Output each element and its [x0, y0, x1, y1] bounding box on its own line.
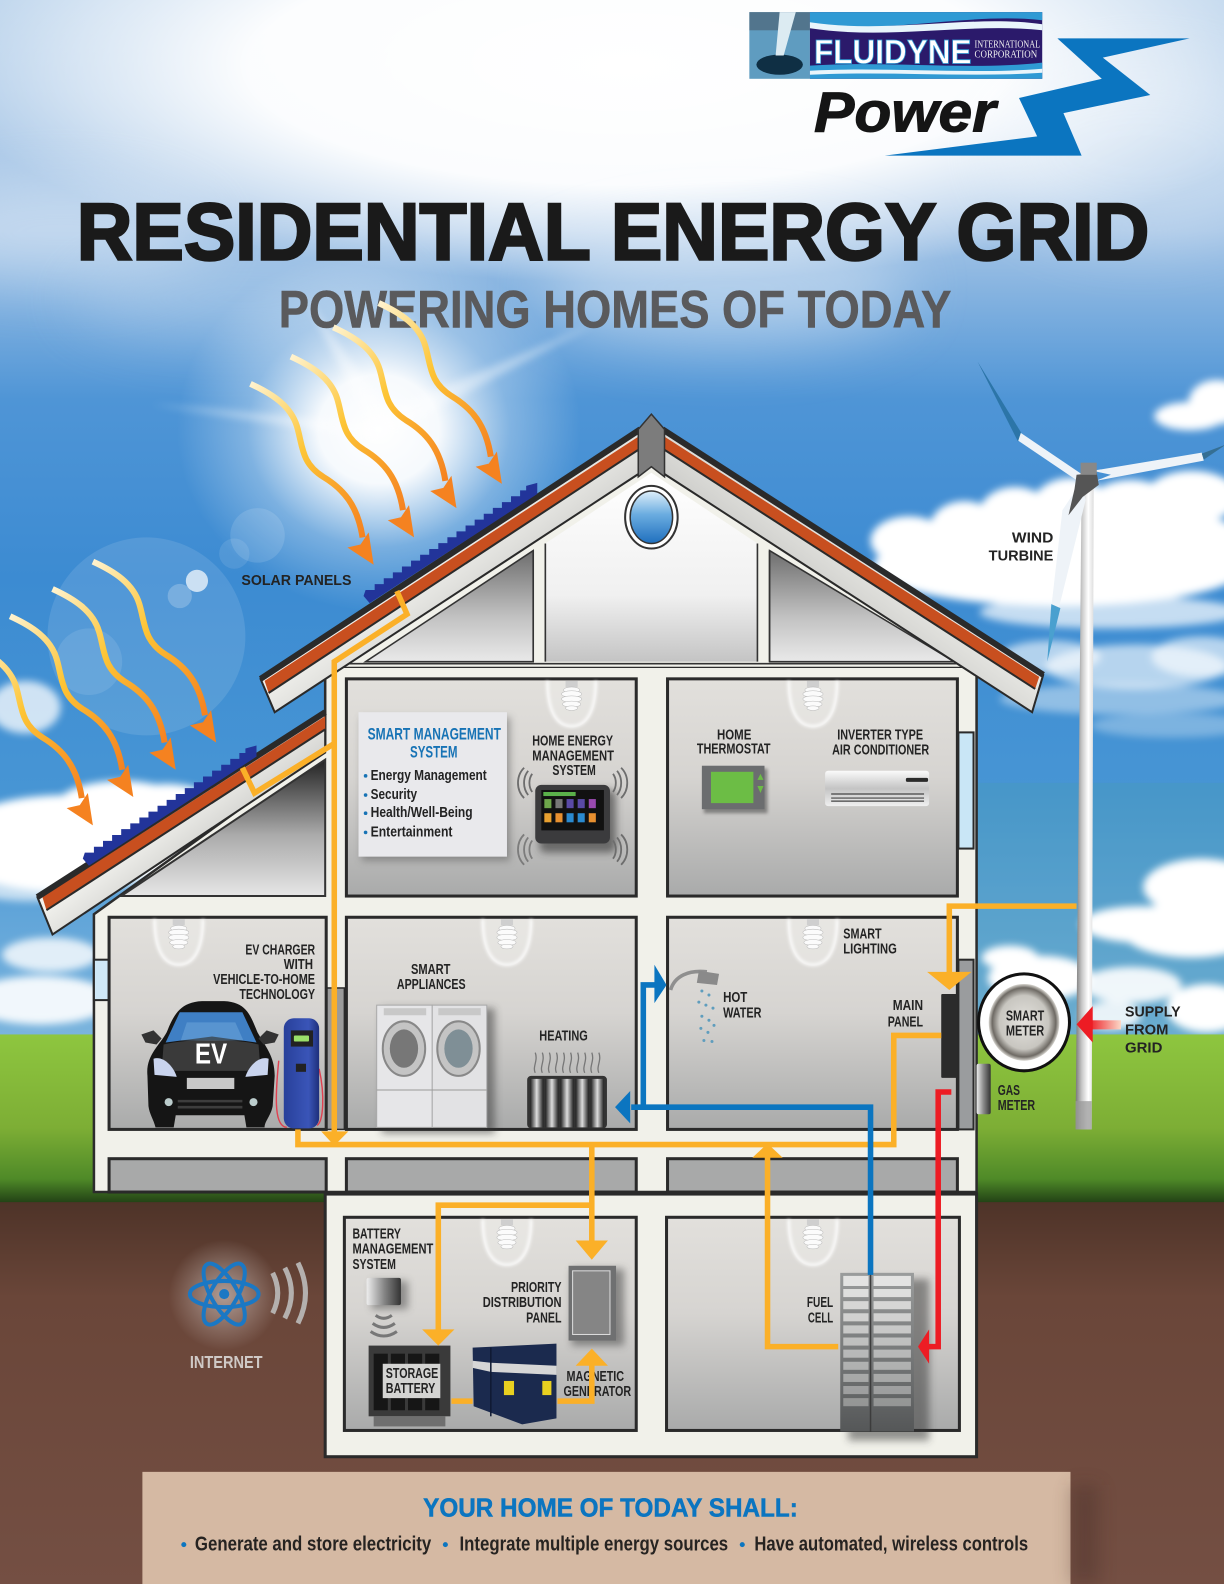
red heat line — [918, 1092, 951, 1364]
wind turbine label: WIND — [1012, 529, 1053, 546]
main roof right — [662, 429, 1043, 712]
turbine blades — [978, 362, 1224, 662]
icon: panel box — [569, 1266, 624, 1346]
storage battery — [369, 1346, 450, 1426]
orange power lines — [242, 591, 1077, 1401]
electric car — [141, 1001, 279, 1127]
ground: soil — [0, 1202, 1224, 1584]
gas meter — [977, 1064, 1035, 1114]
battery management system — [352, 1226, 434, 1336]
main panel: PANEL — [888, 1013, 923, 1030]
supply from grid label: SUPPLY — [1125, 1003, 1181, 1020]
smart meter — [979, 974, 1069, 1071]
home energy management system — [518, 733, 627, 865]
home thermostat: THERMOSTAT — [697, 741, 771, 758]
arrow: grid supply — [1077, 1006, 1121, 1043]
magnetic generator — [473, 1344, 631, 1424]
gas meter: GAS — [998, 1082, 1020, 1099]
ev charger station — [276, 1018, 323, 1128]
smart lighting label: LIGHTING — [843, 941, 897, 958]
solar panels upper — [364, 483, 537, 603]
basement room left — [344, 1217, 636, 1430]
magnetic generator: MAGNETIC — [567, 1368, 624, 1385]
storage battery: BATTERY — [386, 1380, 435, 1397]
gable wall — [338, 467, 964, 667]
logo: banner: CORPORATION — [975, 50, 1038, 61]
wind turbine label: TURBINE — [989, 548, 1053, 565]
bottom bullets: Integrate multiple energy sources — [460, 1534, 728, 1556]
lean-to attic — [121, 760, 325, 896]
bottom bullets: Generate and store electricity — [195, 1534, 432, 1556]
solar panels lower — [83, 746, 257, 866]
solar rays lower — [0, 562, 216, 825]
magnetic generator: GENERATOR — [564, 1383, 631, 1400]
internet label: INTERNET — [190, 1352, 263, 1372]
bottom bullets — [181, 1534, 1028, 1556]
logo: banner: FLUIDYNE — [814, 34, 972, 72]
logo: banner — [810, 12, 1042, 79]
smart appliances — [377, 961, 495, 1133]
attic middle — [545, 473, 757, 662]
storage battery: STORAGE — [386, 1365, 438, 1382]
wind turbine — [978, 362, 1224, 1129]
priority distribution panel: PRIORITY — [511, 1279, 562, 1296]
bottom panel — [142, 1472, 1099, 1584]
smart appliances: SMART — [411, 961, 451, 978]
room: hot water and main panel — [668, 917, 957, 1129]
smart management system card: Health/Well-Being — [371, 804, 473, 821]
inverter air conditioner — [825, 726, 929, 806]
ground: grass — [0, 1034, 1224, 1204]
smart meter: METER — [1006, 1022, 1044, 1039]
garage wall — [94, 667, 977, 1192]
home energy management system: MANAGEMENT — [532, 748, 615, 765]
bottom bullets: Have automated, wireless controls — [754, 1534, 1028, 1556]
title: RESIDENTIAL ENERGY GRID — [77, 188, 1149, 278]
inverter air conditioner: INVERTER TYPE — [837, 726, 923, 743]
hot water: WATER — [723, 1004, 762, 1021]
gas meter: METER — [998, 1097, 1035, 1114]
supply from grid label: GRID — [1125, 1040, 1162, 1057]
house — [37, 414, 1043, 1457]
icon: shower head — [671, 971, 719, 1043]
ceiling bulbs — [154, 681, 838, 1266]
priority distribution panel: DISTRIBUTION — [483, 1294, 562, 1311]
fuel cell: FUEL — [807, 1294, 833, 1311]
left wall window — [94, 960, 109, 1000]
solar rays upper — [250, 303, 502, 565]
battery management system: BATTERY — [352, 1226, 401, 1243]
inverter air conditioner: AIR CONDITIONER — [832, 742, 929, 759]
oval window — [625, 486, 678, 549]
logo: water photo — [749, 12, 810, 79]
lean-to roof — [37, 712, 325, 934]
smart lighting label: SMART — [843, 925, 882, 942]
smart appliances: APPLIANCES — [397, 976, 466, 993]
bottom heading: YOUR HOME OF TODAY SHALL: — [423, 1492, 798, 1522]
clouds — [0, 380, 1224, 1032]
heating radiator: HEATING — [539, 1028, 588, 1045]
smart management system card: SMART MANAGEMENT — [368, 725, 501, 743]
battery management system: MANAGEMENT — [352, 1241, 434, 1258]
home thermostat — [697, 726, 771, 813]
ev charger label: EV CHARGER — [245, 942, 315, 959]
basement shell — [325, 1194, 977, 1457]
right wall service chase — [958, 960, 974, 1129]
home energy management system: SYSTEM — [552, 762, 596, 779]
ev charger label: VEHICLE-TO-HOME — [213, 971, 315, 988]
smart management system card: Security — [371, 786, 418, 803]
basement room right — [667, 1217, 959, 1430]
sun glow — [47, 248, 596, 735]
heating radiator — [527, 1028, 607, 1128]
smart lighting label — [843, 925, 897, 958]
attic left — [366, 551, 533, 662]
hot water — [671, 971, 762, 1043]
sky background — [0, 0, 1224, 1051]
wind turbine label — [989, 529, 1053, 565]
smart management system card: Entertainment — [371, 823, 452, 840]
internet icon — [169, 1240, 305, 1372]
room: thermostat and air conditioner — [668, 679, 957, 896]
icon: hub tablet — [535, 785, 616, 853]
supply from grid label — [1125, 1003, 1181, 1057]
smart meter: SMART — [1006, 1007, 1045, 1024]
smart management system card: Energy Management — [371, 767, 487, 784]
subtitle: POWERING HOMES OF TODAY — [279, 280, 951, 339]
room: appliances — [346, 917, 636, 1129]
icon: radiator — [527, 1053, 607, 1128]
battery management system: SYSTEM — [352, 1256, 396, 1273]
icon: air conditioner — [825, 771, 929, 806]
ev charger label: WITH — [284, 956, 313, 973]
fuel cell — [807, 1273, 929, 1441]
garage chase — [326, 988, 344, 1129]
supply from grid label: FROM — [1125, 1021, 1168, 1038]
main roof left — [261, 429, 640, 712]
turbine tower — [1076, 483, 1094, 1129]
icon: thermostat — [702, 766, 768, 813]
priority distribution panel: PANEL — [526, 1309, 562, 1326]
home energy management system: HOME ENERGY — [532, 733, 613, 750]
priority distribution panel — [483, 1266, 624, 1346]
attic right — [770, 551, 954, 662]
orange arrowheads — [321, 972, 972, 1366]
blue hot water line — [615, 965, 871, 1275]
logo: banner: INTERNATIONAL — [975, 39, 1040, 50]
logo: lightning bolt — [885, 38, 1190, 156]
main panel — [888, 994, 957, 1078]
logo: Fluidyne Power — [749, 12, 1190, 156]
home thermostat: HOME — [717, 726, 751, 743]
ridge cap — [638, 414, 665, 477]
solar panels label: SOLAR PANELS — [241, 572, 351, 589]
logo: Power wordmark: Power — [814, 80, 999, 143]
hot water: HOT — [723, 989, 748, 1006]
icon: battery sensor — [367, 1278, 408, 1336]
crawl spaces — [109, 1159, 957, 1192]
EV text: EV — [195, 1038, 227, 1070]
ev charger label: TECHNOLOGY — [239, 986, 315, 1003]
smart management system card — [359, 712, 510, 861]
room: garage — [109, 917, 326, 1129]
icon: washer and dryer — [377, 1005, 495, 1133]
main panel: MAIN — [893, 997, 923, 1014]
fuel cell: CELL — [808, 1309, 833, 1326]
icon: signal waves — [518, 768, 627, 865]
right wall window — [958, 732, 974, 849]
smart management system card: SYSTEM — [410, 744, 457, 762]
ev charger label — [213, 942, 315, 1003]
room: smart management — [346, 679, 636, 896]
